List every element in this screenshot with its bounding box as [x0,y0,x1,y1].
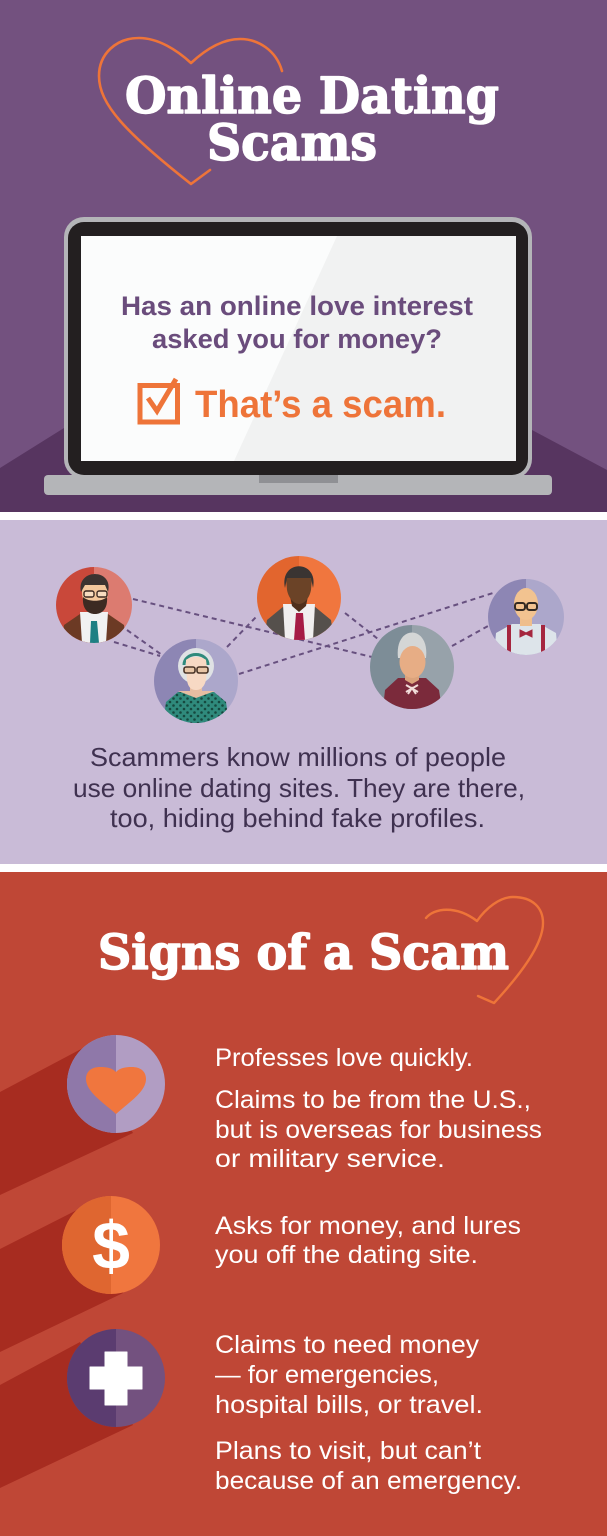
text: sign group two: Asks for money, and lures [215,1212,521,1240]
text: scammers note [73,742,525,833]
person: older woman with glasses [154,639,238,723]
text: sign group one: Professes love quickly. [215,1044,473,1072]
title: Scams [207,113,377,172]
text: scammers note: Scammers know millions of people [90,742,506,772]
person: man with bow tie [488,579,564,655]
icon: checkbox [140,379,178,422]
text: sign group two: you off the dating site. [215,1241,478,1269]
text: sign group three: hospital bills, or travel. [215,1391,483,1419]
person: man in suit [257,556,341,640]
title [125,66,499,172]
callout: that's a scam: That’s a scam. [195,384,446,426]
text: sign group two [215,1212,521,1269]
screen question: asked you for money? [152,324,442,354]
text: scammers note: too, hiding behind fake profiles. [110,803,485,833]
text: sign group one: but is overseas for business [215,1116,542,1144]
screen question: Has an online love interest [121,291,473,321]
icon: dollar badge: $ [92,1208,130,1284]
text: sign group three: Claims to need money [215,1331,480,1359]
text: sign group three [215,1331,522,1495]
network dashed lines [114,593,493,674]
screen question [121,291,473,354]
person: older woman with bun [370,625,454,709]
panel: signs of a scam [0,872,607,1536]
laptop floor shadow [0,428,607,512]
text: sign group one: or military service. [215,1145,445,1173]
panel: header [0,0,607,512]
text: sign group three: Plans to visit, but can’t [215,1437,481,1465]
icon: outline heart [99,38,282,184]
person: bearded man [56,567,132,643]
text: sign group one: Claims to be from the U.S., [215,1086,531,1114]
panel: people [0,520,607,864]
icon: cross badge [0,1329,165,1488]
title: Online Dating [125,66,499,125]
laptop [44,217,552,495]
icon: heart badge [0,1035,165,1195]
text: sign group three: — for emergencies, [215,1361,439,1389]
icon: outline heart [426,897,543,1003]
icon: dollar badge [0,1196,160,1352]
text: sign group one [215,1044,542,1173]
heading: Signs of a Scam [98,925,509,981]
text: sign group three: because of an emergency. [215,1467,522,1495]
text: scammers note: use online dating sites. They are there, [73,773,525,803]
